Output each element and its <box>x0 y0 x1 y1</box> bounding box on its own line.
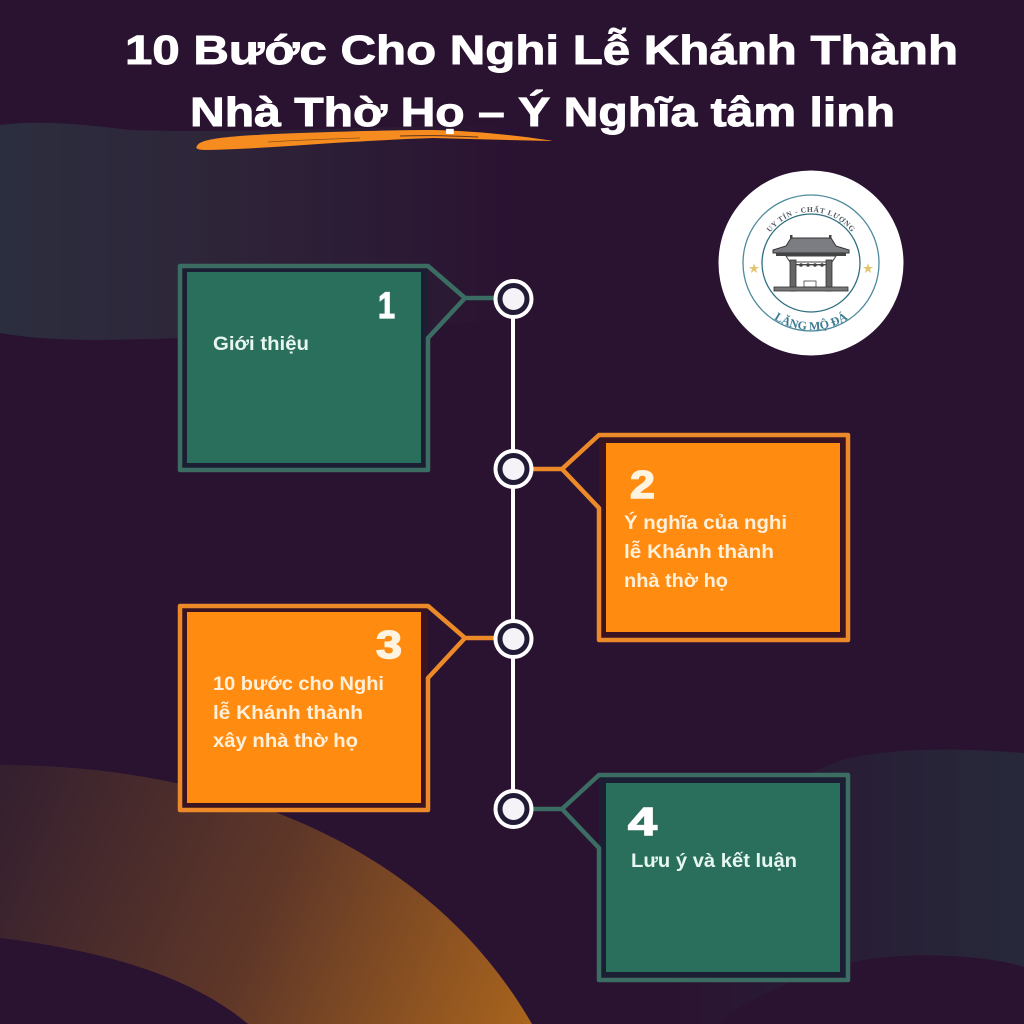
logo building <box>773 235 849 291</box>
panel 2 fill <box>606 443 840 632</box>
panel 2 number: 2 <box>630 464 655 507</box>
panel 2 text <box>624 512 787 592</box>
timeline node 4 <box>496 791 532 827</box>
panel 2 outline and connector <box>530 435 848 640</box>
panel 3: orange, left <box>180 606 497 810</box>
orange brush underline <box>196 130 553 150</box>
timeline node 1 <box>496 281 532 317</box>
panel 4 fill <box>606 783 840 972</box>
logo badge: ★ <box>862 263 874 275</box>
background shape: top left <box>0 123 520 340</box>
panel 3 text: 10 bước cho Nghi <box>213 674 384 695</box>
logo bottom text: LĂNG MỘ ĐÁ <box>774 311 848 331</box>
panel 3 text: xây nhà thờ họ <box>213 731 358 752</box>
title line 1: 10 Bước Cho Nghi Lễ Khánh Thành <box>125 27 958 73</box>
panel 1 fill <box>187 272 421 463</box>
panel 4 outline and connector <box>530 775 848 980</box>
panel 1 text: Giới thiệu <box>213 334 309 355</box>
panel 2 text: nhà thờ họ <box>624 571 728 592</box>
panel 2 text: Ý nghĩa của nghi <box>624 512 787 534</box>
title line 2: Nhà Thờ Họ – Ý Nghĩa tâm linh <box>190 89 895 135</box>
panel 2 text: lễ Khánh thành <box>624 541 774 563</box>
logo top text: UY TÍN - CHẤT LƯỢNG <box>766 206 855 232</box>
panel 3 fill <box>187 612 421 803</box>
panel 2: orange, right <box>530 435 848 640</box>
panel 3 text <box>213 674 384 752</box>
panel 4: green, right <box>530 775 848 980</box>
title <box>125 27 958 135</box>
background shape: bottom left orange arc <box>0 765 532 1024</box>
panel 1: green, left <box>180 266 497 470</box>
timeline line <box>511 299 515 809</box>
background shape: bottom right <box>660 749 1024 1024</box>
timeline node 2 <box>496 451 532 487</box>
panel 4 text: Lưu ý và kết luận <box>631 851 797 872</box>
panel 3 outline and connector <box>180 606 497 810</box>
timeline node 3 <box>496 621 532 657</box>
logo stars: ★ <box>748 263 760 275</box>
panel 4 number: 4 <box>628 801 657 844</box>
panel 1 outline and connector <box>180 266 497 470</box>
panel 1 number: 1 <box>378 285 395 326</box>
panel 3 number: 3 <box>376 624 402 667</box>
panel 3 text: lễ Khánh thành <box>213 702 363 724</box>
logo badge <box>718 170 904 356</box>
